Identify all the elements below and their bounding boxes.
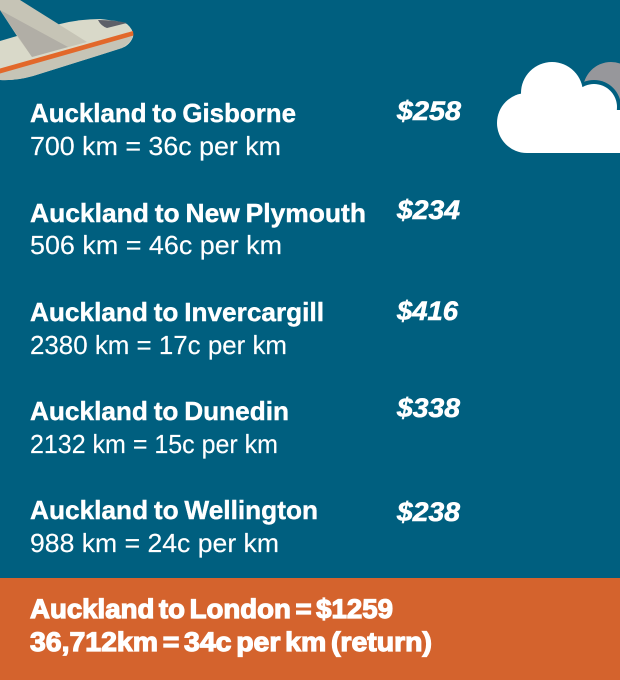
icon: airplane [0, 0, 134, 80]
route: Auckland to Dunedin: $338 [396, 393, 460, 423]
panel: Auckland to London banner: Auckland to London = $1259 [30, 594, 393, 624]
route: Auckland to Wellington: 988 km = 24c per km [30, 528, 279, 558]
panel: Auckland to London banner [0, 578, 620, 680]
route: Auckland to Gisborne: Auckland to Gisborne [30, 98, 296, 128]
route: Auckland to New Plymouth: Auckland to New Plymouth [30, 198, 366, 228]
route: Auckland to Invercargill: $416 [396, 296, 459, 326]
route: Auckland to Gisborne [30, 96, 461, 161]
route: Auckland to New Plymouth [30, 195, 460, 260]
route: Auckland to New Plymouth: 506 km = 46c per km [30, 230, 282, 260]
route: Auckland to Invercargill: 2380 km = 17c per km [30, 330, 287, 360]
route: Auckland to Dunedin: 2132 km = 15c per km [30, 429, 278, 459]
icon: cloud with grey cloud behind [497, 62, 620, 153]
route: Auckland to Wellington [30, 495, 460, 558]
route: Auckland to Wellington: Auckland to Wellington [30, 495, 318, 525]
route: Auckland to Dunedin: Auckland to Dunedin [30, 396, 289, 426]
route: Auckland to Wellington: $238 [396, 497, 460, 527]
panel: Auckland to London banner: 36,712km = 34c per km (return) [30, 627, 432, 657]
route: Auckland to Gisborne: $258 [396, 96, 461, 126]
route: Auckland to Dunedin [30, 393, 460, 459]
route: Auckland to Gisborne: 700 km = 36c per km [30, 131, 281, 161]
route: Auckland to New Plymouth: $234 [396, 195, 460, 225]
route: Auckland to Invercargill: Auckland to Invercargill [30, 297, 324, 327]
route: Auckland to Invercargill [30, 296, 459, 360]
